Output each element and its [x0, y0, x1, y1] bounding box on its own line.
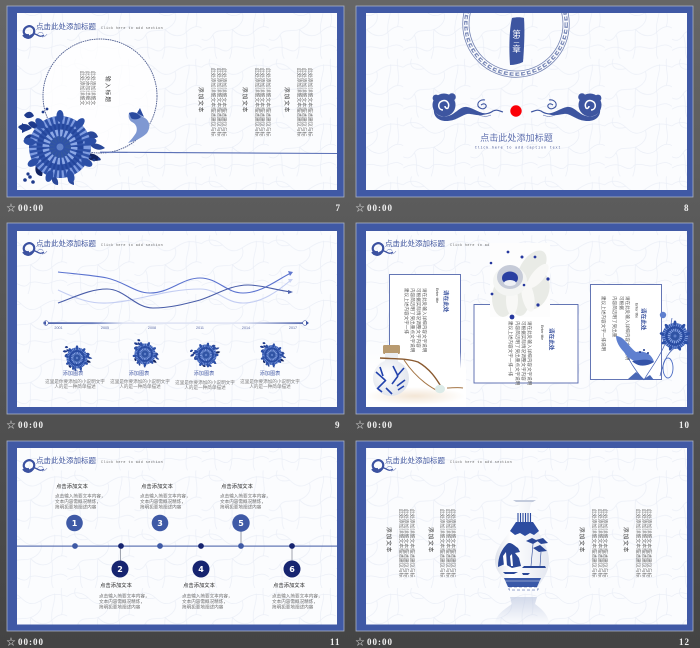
step 2: 简明扼要地阐述内容 — [99, 604, 141, 610]
slide 9: line chart — [6, 223, 344, 430]
step 2: 文本内容需概况精炼， — [99, 598, 145, 605]
text columns: 此处添加详细文本描述建议与标 — [220, 68, 228, 137]
timeline axis: 2005 — [101, 326, 109, 330]
text box 1: 请在此处输入详细内容文字说明 — [421, 288, 428, 353]
text box 1 — [390, 274, 460, 374]
text box 3: 内容简洁明了突出重 — [611, 296, 618, 338]
arrowheads — [288, 271, 293, 294]
step 2: 2 — [117, 565, 123, 574]
flower item 4 — [240, 341, 300, 390]
footer: ☆ — [6, 637, 16, 647]
step 2 — [99, 543, 150, 610]
left text columns: 此处添加详细文本描述建议与标 — [444, 509, 452, 578]
right text columns: 此处添加详细文本描述建议与标 — [590, 509, 598, 578]
left text columns: 添加文本 — [427, 527, 435, 553]
reflection — [495, 597, 549, 624]
slide frame — [7, 441, 344, 631]
right text columns: 添加文本 — [622, 527, 630, 553]
flower item 3 — [175, 336, 235, 391]
text columns: 添加文本 — [283, 87, 291, 113]
footer — [356, 203, 690, 213]
series: pale line — [58, 280, 291, 303]
step 5: 点击输入简要文本内容， — [220, 492, 271, 500]
flower item 1: 这里是你要添加的小说明文字 — [45, 378, 105, 385]
slide header: 点击此处添加标题 — [36, 238, 96, 248]
left text columns: 添加文本 — [385, 527, 393, 553]
slide 12: porcelain vase — [356, 441, 693, 647]
red dot — [510, 105, 522, 117]
image: white lotus — [490, 243, 555, 319]
text box 3: 请在此处输入详细内容文字说明 — [624, 296, 631, 361]
text box 1: 建议上述内容文字一排 — [403, 288, 410, 334]
flower item 2: 添加图表 — [129, 369, 150, 377]
step 5: 点击添加文本 — [221, 482, 254, 490]
step 3: 文本内容需概况精炼， — [140, 498, 186, 505]
chapter title: Click here to add caption text — [475, 146, 561, 150]
text box 3: Enter title — [634, 303, 638, 318]
text columns: 此处添加详细文本描述建议与标 — [264, 68, 272, 137]
step 1: 文本内容需概况精炼， — [55, 498, 101, 505]
left text columns: 此处添加详细文本描述建议与标 — [398, 509, 404, 578]
footer: 00:00 — [18, 637, 44, 647]
dashed circle — [43, 39, 157, 153]
text box 2: 请在此处 — [548, 328, 556, 351]
timeline axis — [43, 321, 309, 330]
footer: ☆ — [6, 420, 16, 430]
flower item 4: 人的是一种简单描述 — [249, 383, 291, 390]
left text columns: 此处添加详细文本描述建议与标 — [402, 509, 410, 578]
footer: ☆ — [356, 203, 365, 213]
step 1: 简明扼要地阐述内容 — [55, 504, 97, 510]
icon: left cloud — [432, 93, 503, 121]
step 3 — [140, 482, 191, 549]
slide frame — [356, 441, 693, 631]
slide frame — [7, 6, 344, 197]
step 1: 1 — [72, 519, 78, 528]
timeline axis: 2011 — [196, 326, 204, 330]
step 3: 3 — [157, 519, 163, 528]
chapter title — [475, 132, 561, 150]
step 5: 文本内容需概况精炼， — [220, 498, 266, 505]
text columns: 添加文本 — [241, 87, 249, 113]
timeline axis: 2014 — [242, 326, 250, 330]
text box 3: 请在此处 — [640, 308, 648, 331]
step 1 — [55, 482, 106, 549]
icon: peony flower — [18, 108, 105, 185]
timeline axis: 2001 — [54, 326, 63, 330]
chapter brush label — [509, 17, 524, 65]
text box 3 — [590, 284, 662, 380]
step 1: 点击输入简要文本内容， — [55, 492, 106, 500]
slide 7: circle with peony — [6, 6, 344, 213]
flower item 3: 添加图表 — [194, 369, 215, 377]
step 6: 6 — [289, 565, 295, 574]
text box 1: 内容简洁明了突出重点文字说明 — [409, 288, 416, 353]
line chart — [58, 271, 293, 308]
step 6: 文本内容需概况精炼， — [272, 598, 318, 605]
right text columns: 此处添加详细文本描述建议与标 — [596, 509, 604, 578]
slide header: 点击此处添加标题 — [36, 21, 96, 31]
text columns: 此处添加详细文本描述建议与标 — [300, 68, 308, 137]
text box 2: 建议上述内容文字一排一排 — [507, 321, 514, 377]
footer: 9 — [335, 420, 340, 430]
flower item 4: 这里是你要添加的小说明文字 — [240, 378, 300, 385]
slide header: Click here to add section — [101, 460, 163, 465]
footer: 00:00 — [18, 203, 44, 213]
slide header: 点击此处添加标题 — [385, 455, 445, 465]
step 5: 5 — [238, 519, 244, 528]
text box 1: 可根据实际情况调整文字内容 — [415, 288, 422, 348]
text columns: 此处添加详细文本描述建议与标 — [306, 68, 314, 137]
step 3: 点击输入简要文本内容， — [140, 492, 191, 500]
footer — [356, 420, 690, 430]
text box 1: Enter title — [435, 288, 439, 303]
footer: 12 — [679, 637, 690, 647]
chapter brush label: 第 — [512, 29, 521, 39]
footer — [356, 637, 690, 647]
slide header — [372, 455, 512, 472]
step 5: 简明扼要地阐述内容 — [220, 504, 262, 510]
text box 2: 可根据实际情况调整文字内容 — [520, 321, 527, 381]
left text columns — [385, 509, 456, 578]
step 5 — [220, 482, 271, 549]
text box 2: Enter title — [540, 325, 544, 340]
footer: 00:00 — [367, 203, 393, 213]
right text columns: 此处添加详细文本描述建议与标 — [602, 509, 608, 578]
icon: koi fish — [128, 108, 149, 143]
slide header: Click here to add section — [101, 26, 163, 31]
slide header — [23, 238, 163, 255]
text box 1: 请在此处 — [442, 290, 450, 313]
slide header — [23, 21, 163, 38]
horizontal line — [100, 152, 337, 154]
text box 2 — [474, 304, 578, 386]
flower item 2 — [110, 337, 170, 390]
right text columns: 此处添加详细文本描述建议与标 — [640, 509, 648, 578]
circle text: 此处添加详细文 — [78, 71, 86, 105]
slide header: Click here to add section — [101, 243, 163, 248]
text columns: 此处添加详细文本描述建议与标 — [210, 68, 216, 137]
text columns: 此处添加详细文本描述建议与标 — [254, 68, 260, 137]
image: vase — [495, 500, 549, 624]
icon: right cloud — [531, 93, 602, 121]
slide frame — [356, 223, 693, 414]
right text columns: 此处添加详细文本描述建议与标 — [634, 509, 642, 578]
step 6: 点击输入简要文本内容， — [272, 592, 323, 600]
footer — [6, 420, 340, 430]
footer: 10 — [679, 420, 690, 430]
right text columns — [578, 509, 652, 578]
meander ring — [462, 13, 570, 78]
timeline axis: 2008 — [148, 326, 156, 330]
slide header — [372, 238, 512, 255]
footer: 7 — [336, 203, 341, 213]
left text columns: 此处添加详细文本描述建议与标 — [438, 509, 446, 578]
step 6: 简明扼要地阐述内容 — [272, 604, 314, 610]
step 2: 点击输入简要文本内容， — [99, 592, 150, 600]
flower item 2: 人的是一种简单描述 — [119, 383, 161, 390]
text box 3: 可根据 — [618, 296, 625, 310]
slide 11: horizontal timeline — [6, 441, 344, 647]
slide 8: chapter divider — [356, 0, 693, 213]
flower item 3: 人的是一种简单描述 — [184, 384, 226, 391]
text columns: 此处添加详细文本描述建议与标 — [258, 68, 266, 137]
footer — [6, 637, 341, 647]
text columns: 此处添加详细文本描述建议与标 — [216, 68, 222, 137]
left text columns: 此处添加详细文本描述建议与标 — [408, 509, 416, 578]
flower item 4: 添加图表 — [260, 369, 281, 377]
step 4: 点击添加文本 — [183, 581, 216, 589]
footer — [6, 203, 341, 213]
step 4: 简明扼要地阐述内容 — [182, 604, 224, 610]
right text columns: 添加文本 — [578, 527, 586, 553]
slide header: Click here to add section — [450, 460, 512, 465]
step 2: 点击添加文本 — [100, 581, 133, 589]
text box 2: 内容简洁明了突出重点文字说明 — [514, 321, 521, 386]
step 6 — [272, 543, 323, 610]
flower item 2: 这里是你要添加的小说明文字 — [110, 378, 170, 385]
circle text: 此处添加详细文 — [84, 71, 91, 105]
step 3: 点击添加文本 — [141, 482, 174, 490]
series: dark line — [58, 285, 291, 308]
text box 2: 请在此处输入详细内容文字说明 — [526, 321, 533, 386]
flower item 1: 添加图表 — [63, 369, 84, 377]
footer: ☆ — [356, 420, 365, 430]
text columns — [197, 68, 314, 137]
step 6: 点击添加文本 — [273, 581, 306, 589]
circle text — [78, 71, 112, 105]
series: mid line — [58, 272, 291, 293]
slide header: Click here to add section — [450, 243, 512, 248]
image: porcelain jar with rope — [365, 345, 466, 407]
image: lotus painting — [616, 312, 691, 380]
flower item 1 — [45, 345, 105, 390]
slide header — [23, 455, 163, 472]
text box 3: 建议上述内容文字一排说明 — [600, 296, 607, 352]
footer: ☆ — [6, 203, 16, 213]
step 4: 文本内容需概况精炼， — [182, 598, 228, 605]
chapter brush label: 章 — [512, 44, 521, 54]
text columns: 此处添加详细文本描述建议与标 — [296, 68, 302, 137]
circle text: 输入标题 — [104, 76, 112, 103]
circle text: 此处添加详细文 — [90, 71, 96, 105]
flower item 3: 这里是你要添加的小说明文字 — [175, 379, 235, 386]
chapter brush label: 二 — [513, 39, 520, 45]
left text columns: 此处添加详细文本描述建议与标 — [450, 509, 456, 578]
footer: 11 — [330, 637, 341, 647]
footer: 00:00 — [18, 420, 44, 430]
step 4: 4 — [198, 565, 204, 574]
footer: 00:00 — [367, 420, 393, 430]
step 1: 点击添加文本 — [56, 482, 89, 490]
slide header: 点击此处添加标题 — [385, 238, 445, 248]
footer: 00:00 — [367, 637, 393, 647]
right text columns: 此处添加详细文本描述建议与标 — [646, 509, 652, 578]
slide header: 点击此处添加标题 — [36, 455, 96, 465]
step 3: 简明扼要地阐述内容 — [140, 504, 182, 510]
step 4: 点击输入简要文本内容， — [182, 592, 233, 600]
slide frame — [7, 223, 344, 414]
text columns: 添加文本 — [197, 87, 205, 113]
slide 10: three text boxes with porcelain — [356, 223, 693, 430]
slide frame — [356, 6, 693, 197]
timeline line — [17, 546, 337, 547]
footer: ☆ — [356, 637, 365, 647]
footer: 8 — [684, 203, 690, 213]
timeline axis: 2017 — [289, 326, 297, 330]
chapter title: 点击此处添加标题 — [480, 132, 553, 143]
step 4 — [182, 543, 233, 610]
flower item 1: 人的是一种简单描述 — [54, 383, 96, 390]
